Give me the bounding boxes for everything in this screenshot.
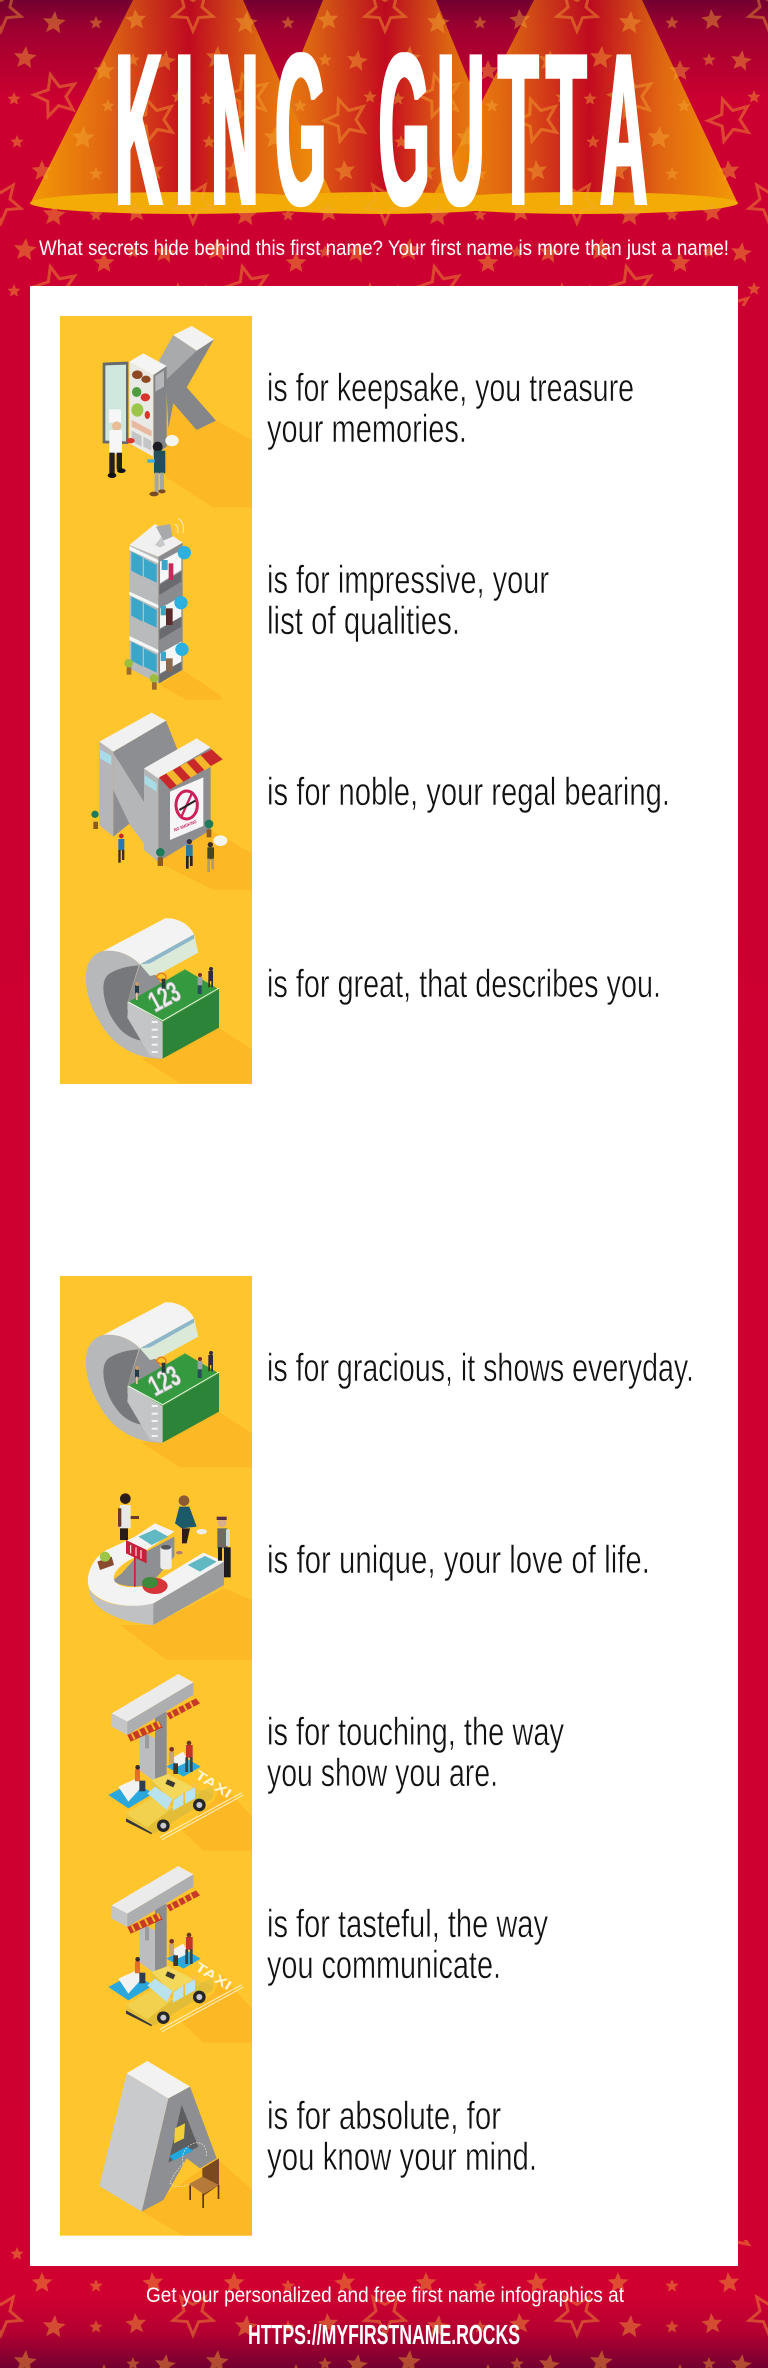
text: I line: list of qualities. xyxy=(267,600,460,643)
icon: letter I office tower xyxy=(60,508,252,700)
footer url: HTTPS://MYFIRSTNAME.ROCKS xyxy=(248,2319,520,2350)
icon: letter N shopfront xyxy=(60,700,252,892)
text: T line: is for touching, the way xyxy=(267,1711,564,1754)
text: T line: you communicate. xyxy=(267,1944,501,1987)
panel: white content xyxy=(30,286,738,2266)
spotlights xyxy=(30,0,738,214)
footer text: Get your personalized and free first name infographics at xyxy=(146,2284,624,2307)
text: A line: you know your mind. xyxy=(267,2136,537,2179)
text: T line xyxy=(267,1903,548,1987)
icon: letter T taxi stop xyxy=(60,1852,252,2044)
icon: letter G with green block xyxy=(60,892,252,1084)
icon: letter G with green block xyxy=(60,1276,252,1468)
icon: letter T taxi stop xyxy=(60,1660,252,1852)
row: A xyxy=(60,2044,537,2236)
title: KING GUTTA xyxy=(115,9,647,252)
icon: letter K with fridge xyxy=(60,316,252,508)
row: G great xyxy=(60,892,661,1084)
text: U line: is for unique, your love of life. xyxy=(267,1539,650,1582)
no smoking sign text: NO SMOKING xyxy=(173,819,198,833)
text: I line xyxy=(267,559,549,643)
icon: letter U counter xyxy=(60,1468,252,1660)
row: T tasteful xyxy=(60,1852,548,2044)
text: T line: is for tasteful, the way xyxy=(267,1903,548,1946)
text: T line xyxy=(267,1711,564,1795)
text: K line: is for keepsake, you treasure xyxy=(267,367,634,410)
text: I line: is for impressive, your xyxy=(267,559,549,602)
row: I xyxy=(60,508,549,700)
row: G gracious xyxy=(60,1276,694,1468)
row: N xyxy=(60,700,670,892)
text: A line xyxy=(267,2095,537,2179)
row: U xyxy=(60,1468,650,1660)
text: K line: your memories. xyxy=(267,408,467,451)
icon: letter A with chair xyxy=(60,2044,252,2236)
text: K line xyxy=(267,367,634,451)
text: A line: is for absolute, for xyxy=(267,2095,501,2138)
text: T line: you show you are. xyxy=(267,1752,498,1795)
row: T touching xyxy=(60,1660,564,1852)
row: K xyxy=(60,316,634,508)
